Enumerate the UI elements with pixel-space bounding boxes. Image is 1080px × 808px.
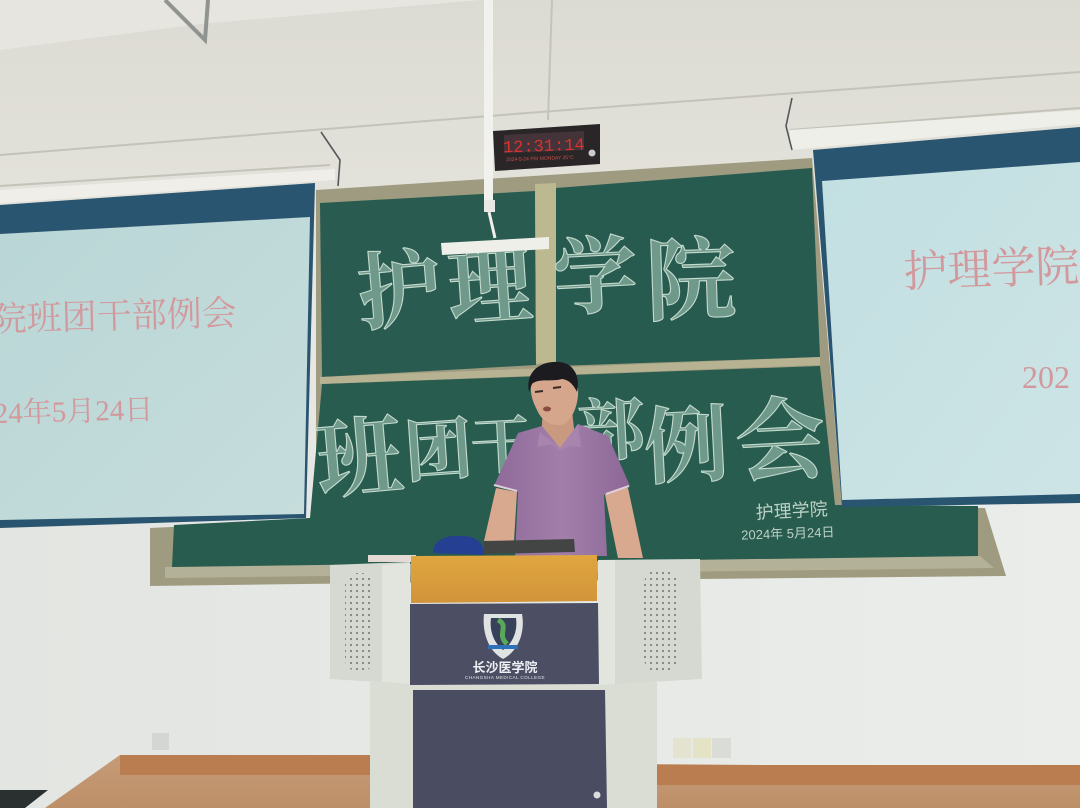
wall: upper (0, 0, 1080, 240)
platform edge (120, 755, 1080, 785)
college emblem (484, 614, 523, 659)
digital clock: 12:31:14 (503, 137, 585, 158)
chalk title line 1: 护 (354, 243, 446, 343)
podium base (370, 682, 657, 808)
chalk title line 1 (354, 230, 738, 343)
podium front panel (410, 603, 599, 685)
left speaker grille (345, 573, 374, 671)
chalk title line 2 (312, 391, 828, 511)
wall: lower (0, 500, 1080, 808)
left speaker wing (330, 562, 410, 684)
digital clock: 2024-5-24 FRI MONDAY 25°C (506, 155, 574, 163)
collar (537, 424, 581, 451)
chalk title line 2: 例 (642, 399, 731, 496)
digital clock (493, 124, 600, 171)
podium (330, 555, 702, 808)
chalk title line 2: 干 (469, 411, 535, 483)
wall sockets (152, 733, 731, 758)
eyes and mouth (535, 387, 561, 392)
blackboard: right upper panel (556, 168, 820, 366)
blackboard: lower panel (172, 366, 978, 567)
college name: 长沙医学院 (472, 660, 538, 675)
blackboard: left upper panel (320, 191, 536, 377)
ceiling strip (0, 0, 480, 50)
blackboard frame (150, 158, 1006, 586)
chalk title line 2: 部 (575, 391, 647, 471)
podium door (413, 690, 607, 808)
folded blue cloth (433, 536, 484, 555)
ceiling trim lines (0, 0, 1080, 186)
wooden floor left (45, 755, 370, 808)
laptop (484, 539, 575, 554)
wooden top (411, 555, 597, 603)
left projector screen (0, 183, 315, 528)
papers (368, 555, 416, 562)
hair (528, 362, 578, 392)
right slide title: 护理学院 (903, 242, 1080, 297)
neck (541, 410, 575, 450)
wooden floor right (657, 764, 1080, 808)
ceiling bracket (165, 0, 208, 40)
right speaker grille (644, 570, 679, 672)
chalk title line 1: 理 (445, 239, 535, 338)
arms (484, 488, 517, 541)
door lock (594, 792, 600, 798)
blackboard lower frame highlight (165, 556, 994, 578)
white trunking above right screen (790, 110, 1080, 150)
chalk title line 2: 团 (402, 411, 475, 491)
face (531, 373, 578, 425)
projector pole and light (441, 0, 549, 255)
right slide date: 202 (1022, 359, 1070, 395)
white trunking above left screen (0, 169, 335, 203)
floor dark corner (0, 790, 48, 808)
chalk title line 1: 院 (644, 231, 738, 334)
right speaker wing (598, 559, 702, 685)
blackboard: centre rail (535, 183, 556, 364)
college english name: CHANGSHA MEDICAL COLLEGE (465, 675, 545, 680)
chalk title line 1: 学 (551, 230, 640, 327)
chalk signature (741, 499, 835, 543)
chalk signature: 2024年 5月24日 (741, 524, 835, 543)
blackboard: horizontal rail (320, 357, 820, 384)
right projector screen (813, 127, 1080, 507)
screen cables (321, 98, 792, 186)
shirt (494, 424, 630, 556)
chalk title line 2: 会 (733, 391, 828, 494)
presenter (484, 362, 643, 558)
chalk signature: 护理学院 (755, 499, 828, 523)
chalk title line 2: 班 (312, 408, 406, 511)
